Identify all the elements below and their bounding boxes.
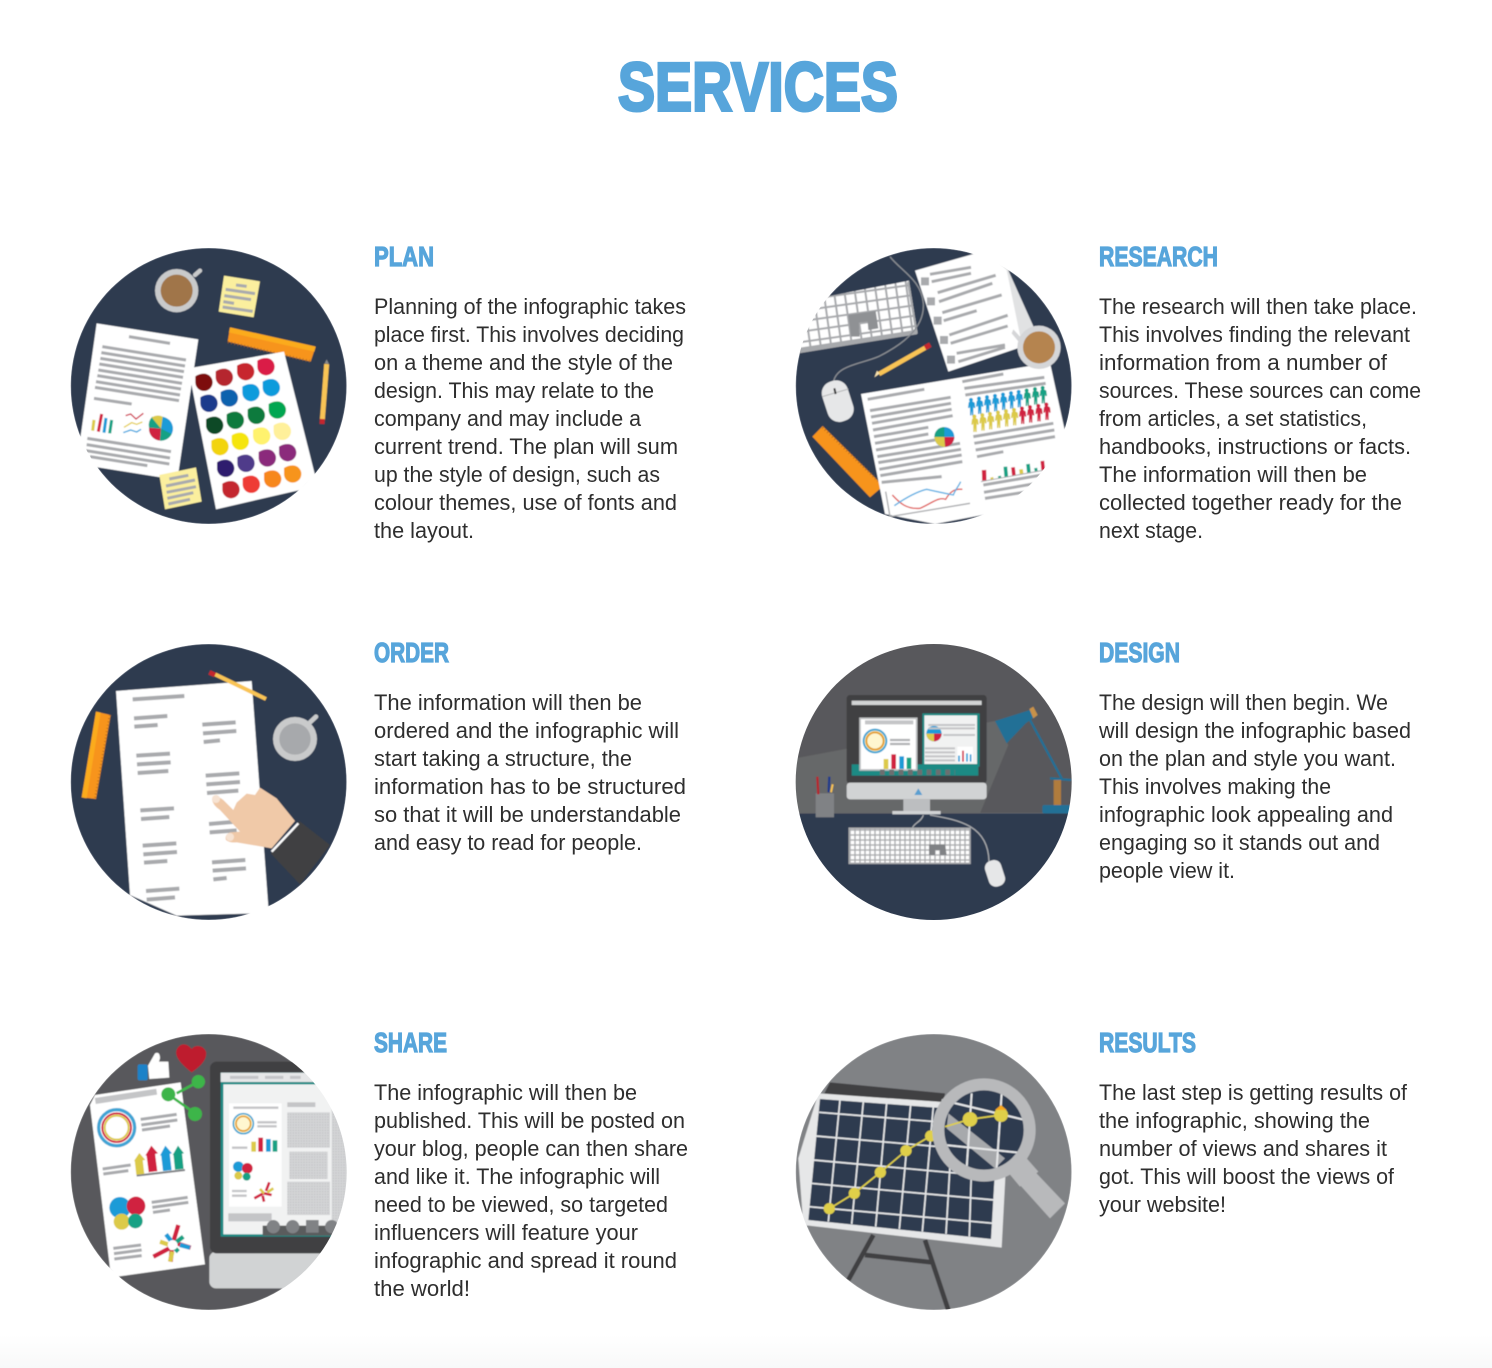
text: design description: This involves making the [1099, 774, 1331, 799]
text: share description: The infographic will then be [374, 1080, 637, 1105]
panel: share [71, 1027, 688, 1310]
text: research description: sources. These sources can come [1099, 378, 1421, 403]
text: plan description: up the style of design, such as [374, 462, 660, 487]
heading: share: SHARE [374, 1027, 447, 1058]
text: share description: your blog, people can then share [374, 1136, 688, 1161]
text: share description: infographic and spread it round [374, 1248, 677, 1273]
text: design description: people view it. [1099, 858, 1235, 883]
text: results description: the infographic, showing the [1099, 1108, 1370, 1133]
text: order description: and easy to read for people. [374, 830, 642, 855]
text: order description: start taking a structure, the [374, 746, 632, 771]
heading: research: RESEARCH [1099, 241, 1218, 272]
text: results description: your website! [1099, 1192, 1226, 1217]
text: plan description: company and may include a [374, 406, 642, 431]
text: order description: ordered and the infographic will [374, 718, 679, 743]
icon: plan desk illustration [71, 248, 347, 524]
text: design description: infographic look appealing and [1099, 802, 1393, 827]
heading: order: ORDER [374, 637, 449, 668]
icon: results chart illustration [796, 1034, 1072, 1310]
text: research description: This involves finding the relevant [1099, 322, 1410, 347]
text: share description: published. This will be posted on [374, 1108, 685, 1133]
text: research description: The research will then take place. [1099, 294, 1417, 319]
text: plan description [374, 294, 686, 543]
text: order description: The information will then be [374, 690, 642, 715]
text: research description: next stage. [1099, 518, 1203, 543]
text: design description: engaging so it stands out and [1099, 830, 1380, 855]
panel: research [792, 241, 1421, 543]
heading: design: DESIGN [1099, 637, 1180, 668]
text: research description [1099, 294, 1421, 543]
text: results description: The last step is getting results of [1099, 1080, 1408, 1105]
text: order description: information has to be structured [374, 774, 686, 799]
text: results description [1099, 1080, 1408, 1217]
text: plan description: the layout. [374, 518, 474, 543]
text: research description: handbooks, instructions or facts. [1099, 434, 1411, 459]
text: plan description: Planning of the infographic takes [374, 294, 686, 319]
text: design description: on the plan and style you want. [1099, 746, 1396, 771]
text: design description: The design will then begin. We [1099, 690, 1388, 715]
panel: order [71, 637, 686, 920]
text: plan description: place first. This involves deciding [374, 322, 684, 347]
text: order description: so that it will be understandable [374, 802, 681, 827]
text: research description: from articles, a set statistics, [1099, 406, 1367, 431]
icon: research desk illustration [792, 248, 1072, 524]
text: results description: number of views and shares it [1099, 1136, 1387, 1161]
heading: results: RESULTS [1099, 1027, 1196, 1058]
text: research description: collected together ready for the [1099, 490, 1402, 515]
text: design description [1098, 690, 1411, 883]
text: share description: the world! [374, 1276, 470, 1301]
text: share description [374, 1080, 688, 1301]
icon: design desktop illustration [796, 644, 1072, 920]
text: plan description: current trend. The plan will sum [374, 434, 678, 459]
panel: plan [71, 241, 686, 543]
text: share description: and like it. The infographic will [374, 1164, 660, 1189]
text: share description: need to be viewed, so targeted [374, 1192, 668, 1217]
text: design description: will design the infographic based [1098, 718, 1411, 743]
text: plan description: design. This may relate to the [374, 378, 654, 403]
text: results description: got. This will boost the views of [1099, 1164, 1395, 1189]
panel: design [785, 635, 1411, 925]
text: research description: The information will then be [1099, 462, 1367, 487]
text: share description: influencers will feature your [374, 1220, 638, 1245]
text: plan description: on a theme and the style of the [374, 350, 673, 375]
text: plan description: colour themes, use of fonts and [374, 490, 677, 515]
page bottom fade [0, 1335, 1492, 1368]
panel: results [796, 1027, 1408, 1310]
text: research description: information from a number of [1099, 350, 1388, 375]
icon: share illustration [71, 1034, 363, 1310]
icon: order document illustration [71, 644, 347, 920]
title: SERVICES [618, 48, 898, 126]
text: order description [374, 690, 686, 855]
heading: plan: PLAN [374, 241, 434, 272]
